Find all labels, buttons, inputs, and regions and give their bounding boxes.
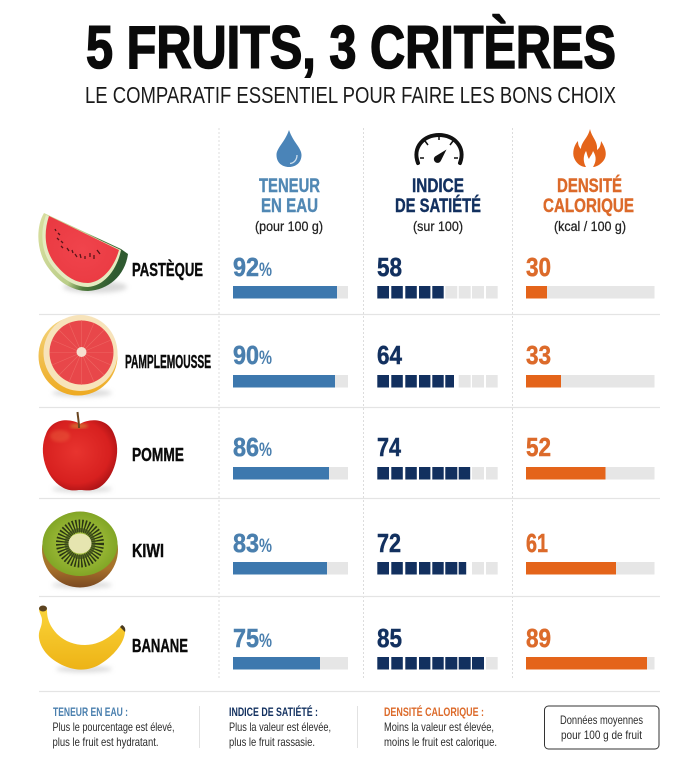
fruit name: POMME: [132, 445, 184, 465]
bar: water: [233, 467, 348, 480]
note box: Données moyennes: [560, 713, 643, 727]
column header: indice de satiété: [395, 135, 481, 234]
legend: indice de satiété: Plus la valeur est élevée,: [229, 720, 331, 734]
value: water: %: [259, 260, 272, 281]
bar: calories: [526, 562, 654, 574]
fruit name: PASTÈQUE: [132, 259, 203, 280]
legend: indice de satiété: [229, 706, 331, 749]
value: water: %: [259, 536, 272, 557]
legend: indice de satiété: plus le fruit rassasie.: [229, 735, 315, 749]
bar: water: [233, 657, 348, 670]
value: water: %: [259, 631, 272, 652]
value: water: 83: [233, 528, 259, 558]
value: calories: 61: [526, 528, 548, 558]
icon: flame: [573, 129, 606, 167]
column header: teneur en eau: [255, 130, 323, 234]
icon: banana: [39, 606, 125, 672]
note box: pour 100 g de fruit: [561, 728, 643, 742]
column header: densité calorique: DENSITÉ: [557, 175, 622, 197]
value: calories: 33: [526, 340, 551, 370]
value: water: 75: [233, 623, 259, 653]
bar: water: [233, 286, 348, 298]
column header: teneur en eau: EN EAU: [261, 196, 318, 217]
bar: calories: [526, 467, 654, 480]
bar: satiety: [377, 375, 498, 388]
column header: densité calorique: (kcal / 100 g): [554, 219, 626, 234]
icon: gauge: [416, 135, 462, 163]
column header: indice de satiété: (sur 100): [413, 219, 463, 234]
fruit name: KIWI: [132, 541, 164, 561]
bar: water: [233, 562, 348, 574]
legend: densité calorique: moins le fruit est calorique.: [384, 735, 497, 749]
bar: satiety: [377, 286, 498, 298]
row: pamplemousse: [38, 315, 654, 397]
legend: densité calorique: Moins la valeur est élevée,: [384, 720, 494, 734]
column header: indice de satiété: INDICE: [412, 176, 464, 197]
value: calories: 52: [526, 432, 551, 462]
bar: water: [233, 375, 348, 388]
bar: calories: [526, 375, 654, 388]
legend: teneur en eau: plus le fruit est hydratant.: [52, 735, 158, 749]
note box: [544, 706, 659, 749]
value: calories: 89: [526, 623, 551, 653]
bar: satiety: [377, 657, 498, 670]
row: pastèque: [38, 213, 655, 298]
value: satiety: 58: [377, 252, 402, 282]
bar: calories: [526, 286, 654, 298]
column header: densité calorique: CALORIQUE: [543, 196, 634, 217]
column header: indice de satiété: DE SATIÉTÉ: [395, 195, 481, 217]
legend: teneur en eau: Plus le pourcentage est élevé,: [52, 720, 174, 734]
column header: teneur en eau: (pour 100 g): [255, 219, 323, 234]
icon: grapefruit: [38, 315, 118, 397]
legend: indice de satiété: INDICE DE SATIÉTÉ :: [229, 706, 318, 719]
value: satiety: 72: [377, 528, 401, 558]
value: water: %: [259, 440, 272, 461]
value: water: 86: [233, 432, 259, 462]
bar: calories: [526, 657, 654, 670]
column header: teneur en eau: TENEUR: [259, 176, 320, 197]
icon: watermelon: [38, 213, 128, 293]
value: satiety: 74: [377, 432, 401, 462]
value: water: 90: [233, 340, 259, 370]
icon: water drop: [276, 130, 302, 167]
fruit name: BANANE: [132, 636, 188, 656]
value: satiety: 85: [377, 623, 402, 653]
value: water: 92: [233, 252, 259, 282]
value: satiety: 64: [377, 340, 402, 370]
value: water: %: [259, 348, 272, 369]
bar: satiety: [377, 467, 498, 480]
fruit name: PAMPLEMOUSSE: [125, 352, 211, 372]
legend: teneur en eau: [52, 707, 174, 749]
column header: densité calorique: [543, 129, 634, 234]
row: pomme: [43, 412, 654, 492]
row: kiwi: [42, 512, 654, 588]
icon: apple: [43, 412, 117, 492]
row: banane: [39, 606, 655, 672]
value: calories: 30: [526, 252, 551, 282]
legend: densité calorique: [384, 706, 497, 749]
legend: densité calorique: DENSITÉ CALORIQUE :: [384, 706, 484, 719]
legend: teneur en eau: TENEUR EN EAU :: [53, 707, 128, 719]
icon: kiwi: [42, 512, 118, 588]
bar: satiety: [377, 562, 498, 574]
